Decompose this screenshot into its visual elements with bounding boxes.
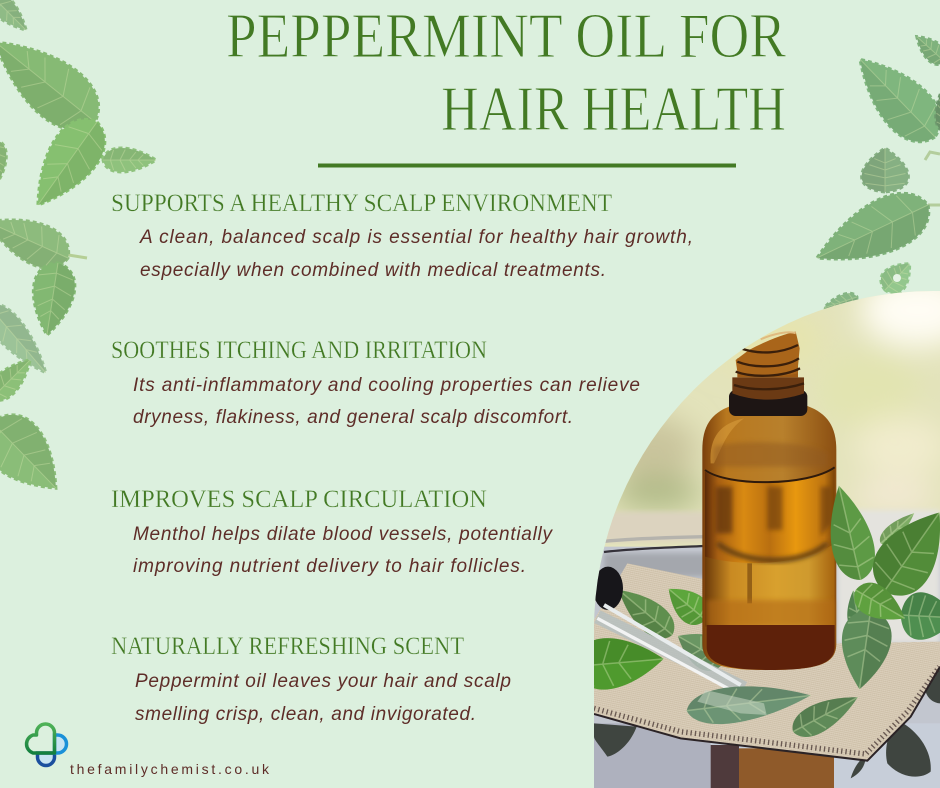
section 3: improving nutrient delivery to hair follicles.	[133, 556, 526, 577]
liquid	[705, 469, 834, 563]
title divider	[318, 164, 736, 168]
pedestal	[711, 745, 834, 788]
collar	[729, 390, 807, 416]
section 4: smelling crisp, clean, and invigorated.	[135, 704, 476, 725]
glass dropper	[593, 567, 744, 692]
section 3: IMPROVES SCALP CIRCULATION	[111, 486, 487, 513]
section 2: Its anti-inflammatory and cooling properties can relieve	[133, 375, 640, 396]
leaf: middle lower	[27, 260, 78, 338]
leaf: large upper right	[842, 42, 940, 154]
section 1: especially when combined with medical treatments.	[140, 260, 606, 281]
logo	[27, 724, 66, 766]
leaves: left column	[0, 0, 156, 508]
section 2: dryness, flakiness, and general scalp discomfort.	[133, 407, 573, 428]
leaf: top corner	[910, 29, 940, 69]
section 3: Menthol helps dilate blood vessels, potentially	[133, 524, 554, 545]
dark base	[707, 625, 835, 670]
section 2	[111, 337, 640, 428]
leaf: top sliver	[0, 0, 34, 38]
leaf: large upper	[0, 20, 113, 144]
leaves right of bottle	[819, 481, 940, 693]
photo backdrop	[594, 273, 940, 788]
highlights upper	[711, 418, 744, 463]
neck	[732, 377, 804, 400]
section 3	[111, 486, 554, 577]
section 4	[111, 633, 511, 725]
stems	[925, 152, 940, 205]
burlap cloth	[594, 563, 940, 761]
leaf: lower of first pair	[18, 108, 117, 219]
bright leaf at left	[594, 638, 664, 690]
section 1: A clean, balanced scalp is essential for healthy hair growth,	[139, 227, 693, 248]
leaf: dark edge sliver	[936, 90, 940, 130]
website: thefamilychemist.co.uk	[70, 761, 270, 777]
section 1: SUPPORTS A HEALTHY SCALP ENVIRONMENT	[111, 190, 612, 217]
leaf: small pointing right	[103, 148, 156, 172]
leaf: round upright	[862, 148, 908, 192]
logo: green heart	[27, 724, 54, 753]
leaf: bottom round	[0, 402, 76, 508]
amber bottle	[702, 332, 836, 670]
logo: bottom lobe	[38, 753, 54, 766]
section 1	[111, 190, 693, 281]
title: HAIR HEALTH	[441, 74, 786, 144]
photo: peppermint oil bottle	[572, 273, 940, 788]
logo: right lobe	[54, 735, 66, 753]
reflected leaves	[594, 667, 940, 778]
section 4: Peppermint oil leaves your hair and scalp	[135, 671, 511, 692]
section 2: SOOTHES ITCHING AND IRRITATION	[111, 337, 487, 364]
leaves: right column	[806, 29, 940, 315]
section 4: NATURALLY REFRESHING SCENT	[111, 633, 464, 660]
leaves left of bottle	[622, 588, 721, 671]
leaf: edge sliver	[0, 139, 8, 183]
leaf: curled fragment	[876, 255, 919, 299]
leaf: small edge	[0, 351, 39, 406]
leaf: pale	[0, 296, 57, 382]
leaf: small above photo	[822, 291, 859, 315]
leaves under dropper	[686, 686, 858, 737]
liquid line	[705, 467, 835, 482]
title	[226, 1, 786, 144]
leaf: middle upper	[0, 203, 87, 277]
leaf: large lower right	[806, 181, 939, 282]
title: PEPPERMINT OIL FOR	[226, 1, 786, 71]
bottle body upper	[702, 406, 836, 670]
liquid refraction	[707, 487, 834, 627]
